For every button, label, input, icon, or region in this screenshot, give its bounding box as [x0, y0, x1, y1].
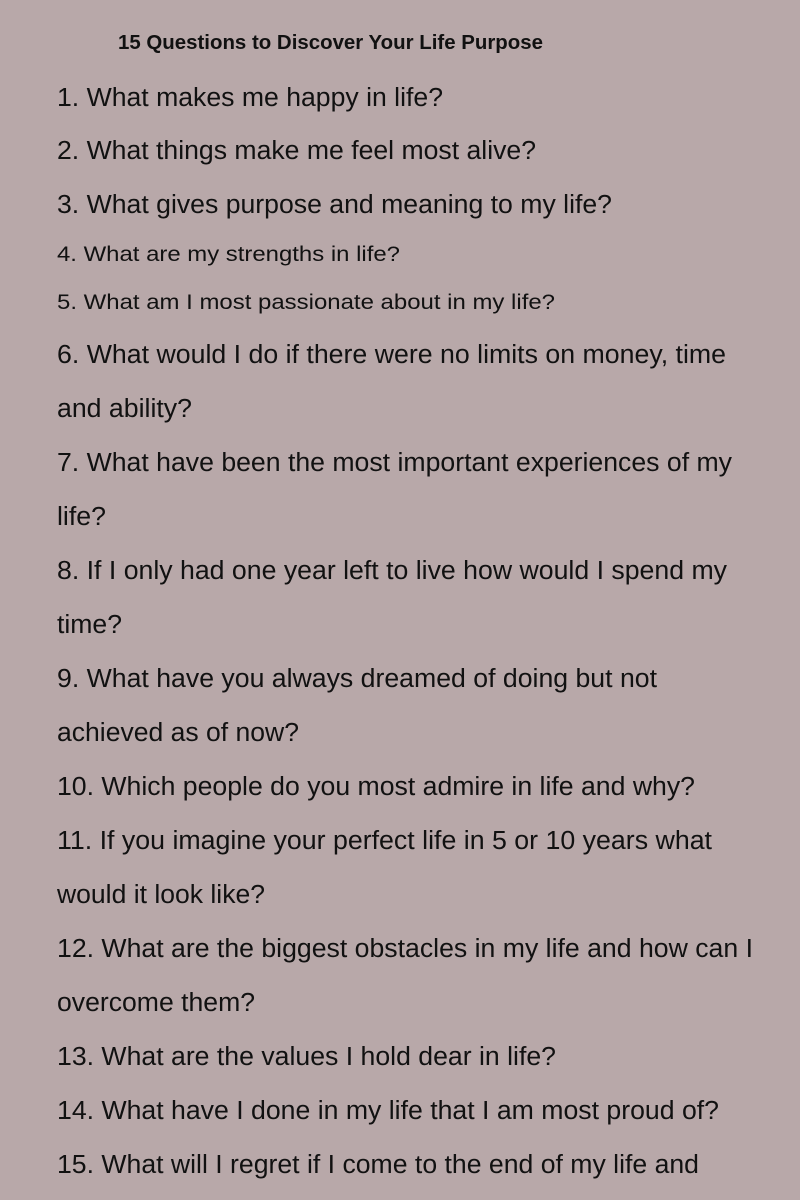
question 8 — [57, 557, 727, 639]
question 1: 1. What makes me happy in life? — [57, 84, 443, 112]
question 9: 9. What have you always dreamed of doing but not — [57, 665, 657, 693]
question 2: 2. What things make me feel most alive? — [57, 137, 536, 165]
question 6: and ability? — [57, 395, 192, 423]
question 7 — [57, 449, 732, 531]
question 14: 14. What have I done in my life that I am most proud of? — [57, 1097, 719, 1125]
question 8: 8. If I only had one year left to live how would I spend my — [57, 557, 727, 585]
question 12: overcome them? — [57, 989, 255, 1017]
question 3: 3. What gives purpose and meaning to my life? — [57, 191, 612, 219]
question 9 — [57, 665, 657, 747]
question 12: 12. What are the biggest obstacles in my life and how can I — [57, 935, 753, 963]
question 11: would it look like? — [56, 881, 265, 909]
question 5: 5. What am I most passionate about in my life? — [57, 291, 555, 314]
title: 15 Questions to Discover Your Life Purpose — [118, 32, 543, 54]
question 11 — [56, 827, 712, 909]
question 8: time? — [57, 611, 122, 639]
question 12 — [57, 935, 753, 1017]
question list — [56, 84, 753, 1179]
question 4: 4. What are my strengths in life? — [57, 243, 400, 266]
question 7: life? — [57, 503, 106, 531]
question 11: 11. If you imagine your perfect life in 5 or 10 years what — [57, 827, 712, 855]
question 10: 10. Which people do you most admire in life and why? — [57, 773, 695, 801]
question 7: 7. What have been the most important experiences of my — [57, 449, 732, 477]
question 6: 6. What would I do if there were no limits on money, time — [57, 341, 726, 369]
question 15: 15. What will I regret if I come to the end of my life and — [57, 1151, 699, 1179]
question 13: 13. What are the values I hold dear in life? — [57, 1043, 556, 1071]
question 6 — [57, 341, 726, 423]
question 9: achieved as of now? — [57, 719, 299, 747]
